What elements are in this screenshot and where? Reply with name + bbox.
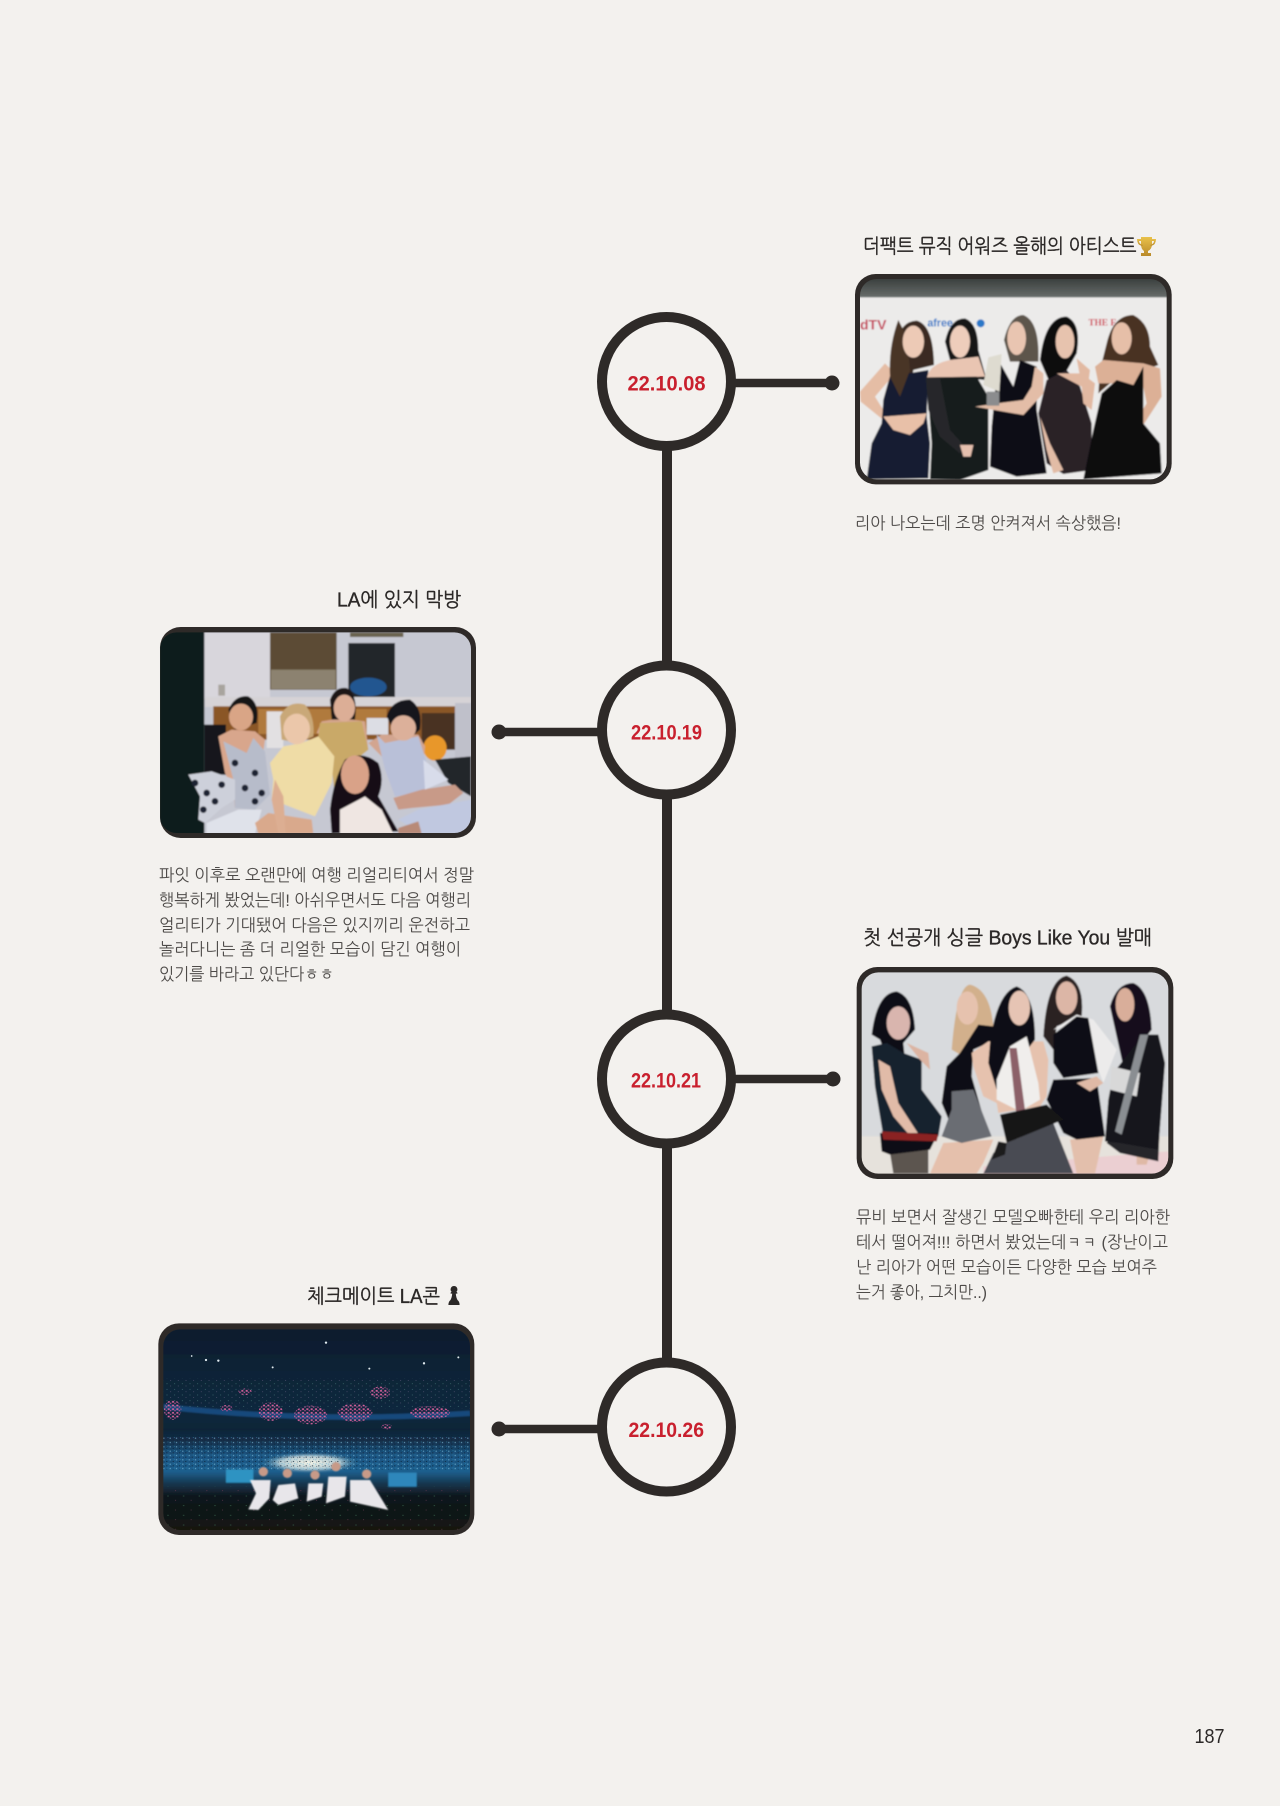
body text: music video: 난 리아가 어떤 모습이든 다양한 모습 보여주 bbox=[856, 1258, 1157, 1277]
node: 22.10.26: 22.10.26 bbox=[628, 1419, 704, 1442]
body text: music video bbox=[856, 1208, 1170, 1302]
person 3 (back centre) bbox=[317, 688, 368, 796]
crowd speckles bbox=[163, 1435, 470, 1470]
photo: Checkmate LA concert stage bbox=[158, 1323, 474, 1535]
timeline page bbox=[158, 236, 1224, 1743]
body text: LA reality show: 행복하게 봤었는데! 아쉬우면서도 다음 여행리 bbox=[159, 891, 471, 910]
node: 22.10.19: 22.10.19 bbox=[631, 722, 702, 744]
icon: chess pawn bbox=[448, 1286, 460, 1305]
person 4 bbox=[1043, 976, 1117, 1174]
performers with banners bbox=[248, 1462, 388, 1510]
logo blocks on backdrop: afree bbox=[927, 318, 953, 330]
body text: LA reality show: 있기를 바라고 있단다ㅎㅎ bbox=[159, 965, 334, 984]
icon: trophy bbox=[1137, 237, 1156, 256]
node: 22.10.21 bbox=[602, 1014, 840, 1144]
person 3 with trophy bbox=[975, 315, 1047, 477]
body text: LA reality show: 얼리티가 기대됐어 다음은 있지끼리 운전하고 bbox=[159, 916, 470, 935]
person 4 (pale blue dress) bbox=[368, 700, 471, 834]
person 5 bbox=[1105, 983, 1165, 1165]
person 2 (yellow shirt) bbox=[255, 704, 334, 834]
person 2 bbox=[930, 985, 993, 1174]
person 5 (front, white shirt) bbox=[330, 755, 422, 834]
person 1 (left, polka-dot pajamas) bbox=[188, 696, 270, 823]
body text: music video: 테서 떨어져!!! 하면서 봤었는데ㅋㅋ (장난이고 bbox=[856, 1233, 1168, 1252]
body text: award: 리아 나오는데 조명 안켜져서 속상했음! bbox=[855, 514, 1121, 533]
body text: music video: 뮤비 보면서 잘생긴 모델오빠한테 우리 리아한 bbox=[856, 1208, 1170, 1227]
logo blocks on backdrop: dTV bbox=[860, 316, 887, 332]
logo blocks on backdrop bbox=[860, 318, 1116, 330]
person 2 bbox=[926, 318, 988, 480]
timeline vertical line bbox=[662, 445, 672, 1365]
body text: LA reality show: 파잇 이후로 오랜만에 여행 리얼리티여서 정말 bbox=[159, 866, 474, 885]
node: 22.10.26 bbox=[492, 1362, 731, 1492]
person 5 bbox=[1083, 315, 1162, 479]
page number: 187 bbox=[1194, 1726, 1224, 1748]
person 3 bbox=[972, 986, 1073, 1174]
photo: Boys Like You concept shot bbox=[857, 967, 1173, 1179]
node: 22.10.19 bbox=[492, 666, 731, 794]
photo: award group shot bbox=[855, 274, 1172, 484]
heading: The Fact Music Awards: 더팩트 뮤직 어워즈 올해의 아티스트 bbox=[863, 236, 1137, 258]
node: 22.10.21: 22.10.21 bbox=[631, 1070, 701, 1092]
pink light clusters bbox=[164, 1387, 450, 1429]
heading: last broadcast in LA: LA에 있지 막방 bbox=[337, 590, 461, 612]
node: 22.10.08: 22.10.08 bbox=[628, 372, 706, 396]
body text: LA reality show: 놀러다니는 좀 더 리얼한 모습이 담긴 여행이 bbox=[159, 940, 461, 959]
photo: bed group shot bbox=[160, 627, 476, 838]
person 1 bbox=[872, 991, 942, 1174]
person 1 bbox=[860, 320, 934, 479]
body text: LA reality show bbox=[159, 866, 474, 984]
person 4 bbox=[1038, 317, 1095, 474]
logo blocks on backdrop: THE F bbox=[1088, 318, 1116, 328]
body text: music video: 는거 좋아, 그치만..) bbox=[856, 1283, 987, 1302]
node: 22.10.08 bbox=[602, 317, 840, 446]
arena light points bbox=[191, 1341, 459, 1370]
heading: Checkmate LA concert: 체크메이트 LA콘 bbox=[307, 1286, 440, 1308]
heading: first single release: 첫 선공개 싱글 Boys Like You 발매 bbox=[863, 928, 1152, 950]
